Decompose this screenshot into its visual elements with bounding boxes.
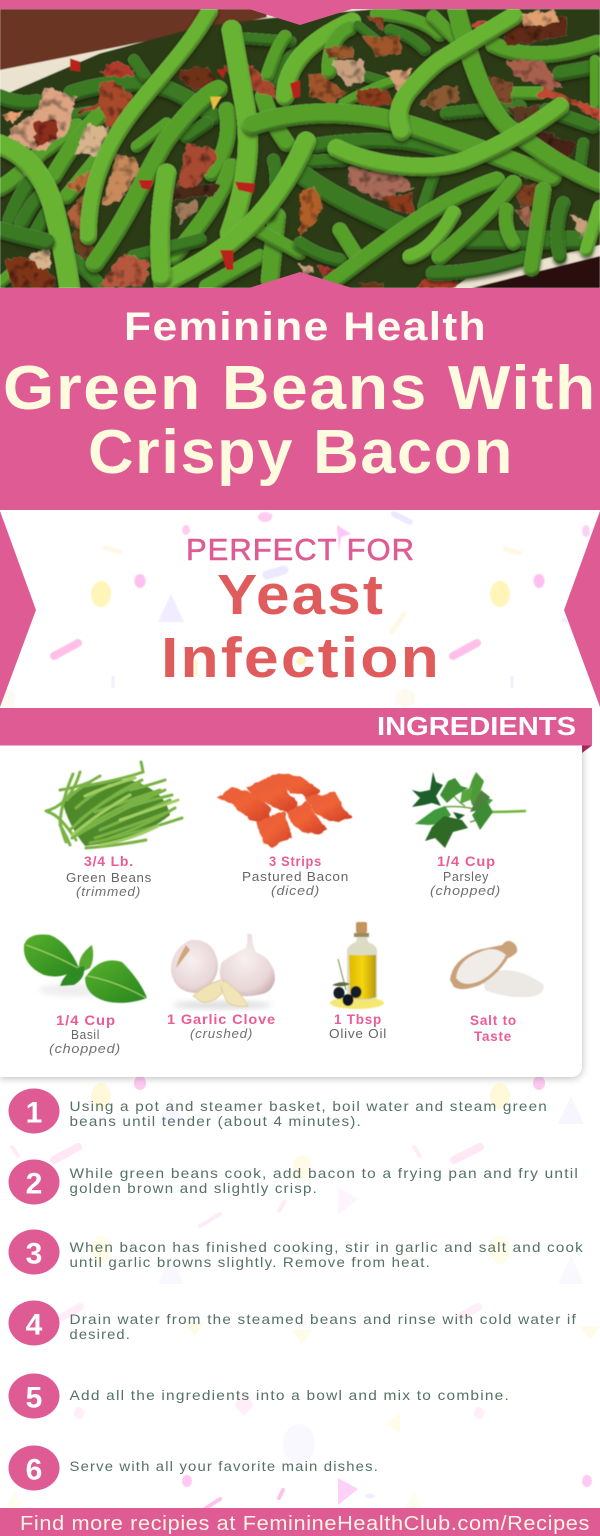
step 2: While green beans cook, add bacon to a frying pan and fry until (70, 1165, 579, 1181)
condition name: Infection (161, 626, 441, 690)
step 6: 6 (26, 1454, 42, 1486)
ingredient: garlic (167, 934, 276, 1041)
step 4: 4 (26, 1308, 43, 1342)
recipe title: Crispy Bacon (88, 418, 514, 487)
back beans (0, 14, 597, 287)
title panel (0, 272, 600, 510)
step 3 (8, 1230, 584, 1274)
icon: parsley sprig (412, 772, 526, 848)
ingredient: bacon (216, 773, 352, 898)
serving tray (0, 9, 600, 288)
step 1 (8, 1088, 548, 1134)
name: Parsley (443, 869, 489, 884)
ingredient: olive oil (329, 922, 387, 1041)
ingredient: green beans (46, 762, 182, 899)
bacon, pecans, onion and chili pieces (3, 10, 600, 288)
ingredient: parsley (412, 772, 526, 898)
ribbon fold (582, 746, 592, 753)
icon: bean pile (46, 762, 182, 848)
name: Basil (71, 1027, 100, 1042)
amount continued: Taste (474, 1029, 512, 1044)
step 3: 3 (26, 1238, 42, 1270)
right ribbon tail (564, 511, 600, 707)
step 3: When bacon has finished cooking, stir in garlic and salt and cook (70, 1239, 584, 1255)
name: Pastured Bacon (242, 869, 349, 884)
step 4: desired. (70, 1326, 131, 1342)
condition name (161, 563, 441, 690)
name: Olive Oil (329, 1026, 387, 1041)
ingredient: basil (24, 934, 147, 1056)
recipe title (3, 354, 597, 487)
dark food base (0, 9, 600, 288)
recipe title: Green Beans With (3, 354, 597, 423)
top pink border with notch (0, 0, 600, 25)
quantity: 3/4 Lb. (84, 854, 134, 869)
icon: garlic bulbs and cloves (171, 934, 275, 1009)
name: Green Beans (66, 870, 152, 885)
step 1: beans until tender (about 4 minutes). (70, 1113, 362, 1129)
step 4: Drain water from the steamed beans and rinse with cold water if (70, 1311, 577, 1327)
preparation: (chopped) (430, 883, 501, 898)
quantity: 1 Garlic Clove (167, 1012, 276, 1027)
perfect for label: PERFECT FOR (186, 532, 415, 567)
table bottom right (472, 256, 600, 288)
banner: perfect for yeast infection (0, 511, 600, 708)
step 1: Using a pot and steamer basket, boil water and steam green (70, 1098, 548, 1114)
icon: basil leaves (24, 934, 147, 1003)
preparation: (chopped) (49, 1041, 121, 1056)
ingredients heading ribbon: INGREDIENTS (377, 711, 576, 741)
icon: bacon strips (216, 773, 352, 848)
quantity: 1/4 Cup (56, 1013, 116, 1028)
step 5: Add all the ingredients into a bowl and mix to combine. (70, 1387, 510, 1403)
step 1: 1 (26, 1096, 42, 1130)
banner confetti (0, 512, 590, 708)
amount: Salt to (470, 1013, 517, 1028)
quantity: 1 Tbsp (334, 1012, 382, 1027)
ingredients card (0, 745, 582, 1077)
preparation: (crushed) (190, 1026, 253, 1041)
step 5 (8, 1374, 510, 1418)
front beans (0, 10, 600, 290)
footer bar: Find more recipies at FeminineHealthClub.com/Recipes (20, 1512, 590, 1535)
step 6: Serve with all your favorite main dishes. (70, 1458, 379, 1474)
ingredients heading ribbon (0, 708, 592, 753)
quantity: 1/4 Cup (437, 854, 496, 869)
icon: wooden scoop of salt (450, 941, 544, 997)
chili flakes (70, 58, 300, 270)
hero photo: green beans with bacon and pecans (0, 9, 600, 290)
step 2: golden brown and slightly crisp. (70, 1180, 318, 1196)
icon: oil bottle with olives (330, 922, 384, 1009)
preparation: (diced) (271, 883, 320, 898)
quantity: 3 Strips (269, 854, 322, 869)
table top left (0, 9, 267, 70)
step 2 (8, 1160, 579, 1204)
step 2: 2 (26, 1168, 42, 1200)
step 5: 5 (26, 1382, 42, 1414)
site heading: Feminine Health (124, 305, 487, 349)
ingredient: salt (450, 941, 544, 1044)
background confetti behind steps (5, 1076, 600, 1509)
step 6 (8, 1446, 379, 1490)
step 3: until garlic browns slightly. Remove from heat. (70, 1254, 431, 1270)
preparation: (trimmed) (76, 884, 141, 899)
left ribbon tail (0, 511, 36, 707)
condition name: Yeast (217, 563, 385, 627)
step 4 (8, 1300, 577, 1346)
